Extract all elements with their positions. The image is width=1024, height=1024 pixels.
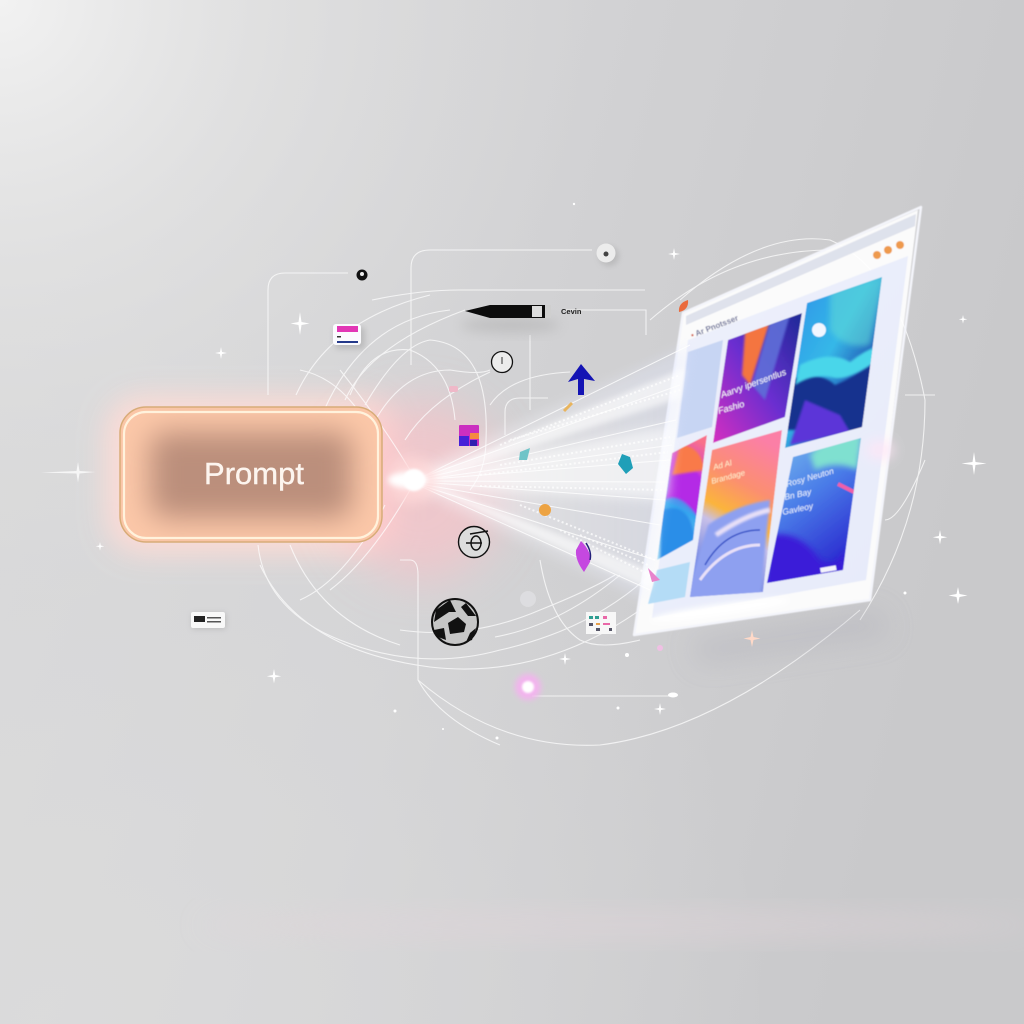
icon: card: [333, 324, 365, 349]
card: orange wave: Ad Al: [711, 458, 733, 472]
panel highlight: [650, 594, 790, 626]
card: blue text: Bn Bay: [783, 486, 813, 502]
card: blue text: Rosy Neuton: [785, 466, 835, 489]
icon: colour tile: [459, 425, 479, 446]
toolbar text: ▪ Ar Pnotsser: [689, 314, 740, 340]
icon: orange tag: [679, 300, 688, 312]
light beam: [412, 345, 690, 600]
icon: palette table: [586, 612, 616, 634]
pencil label: Cevin: [561, 307, 582, 316]
icon: teal seahorse: [618, 454, 633, 474]
card: pale blue: [648, 562, 690, 604]
prompt box: [120, 407, 382, 542]
icon: pink chip: [449, 386, 458, 392]
browser panel: [634, 207, 921, 665]
sparkle: pink: [657, 630, 760, 651]
prompt outer glow: [106, 396, 505, 580]
icon: viewer dot: [356, 270, 368, 280]
prompt label: Prompt: [204, 456, 304, 491]
icon: purple gem: [576, 541, 590, 572]
card: orange wave: [685, 430, 782, 600]
card: light blue: [677, 340, 723, 438]
icon: blue arrow: [568, 364, 595, 395]
card: blue text: [765, 434, 862, 590]
sparkles: [40, 203, 986, 740]
icon: camera knob: [596, 244, 619, 266]
icon: scribble circle: [458, 526, 490, 558]
card headline text: Aarvy ipersentlus: [718, 367, 788, 400]
icon: pencil: [460, 305, 582, 333]
icon: document chip: [191, 612, 226, 629]
card: magenta wave: [657, 435, 707, 560]
inner panel: [652, 256, 908, 618]
glowing node: [388, 456, 436, 504]
glowing pink dot: [515, 674, 678, 700]
connector curves: [258, 239, 935, 745]
window dots: [873, 241, 904, 259]
icon: clock: [492, 352, 512, 372]
icon: small key: [564, 403, 572, 411]
card: blue waves: [780, 275, 885, 448]
icon: soccer ball: [432, 599, 478, 645]
card: orange wave: Brandage: [710, 468, 747, 486]
icon: teal shard: [519, 448, 530, 460]
icon: orange badge: [539, 504, 551, 516]
card: headline: [713, 313, 802, 443]
card: blue text: Gavleoy: [781, 501, 815, 517]
icon: grey circle: [520, 591, 536, 607]
card: headline: Fashio: [717, 399, 746, 416]
icon: pink butterfly: [648, 568, 660, 582]
